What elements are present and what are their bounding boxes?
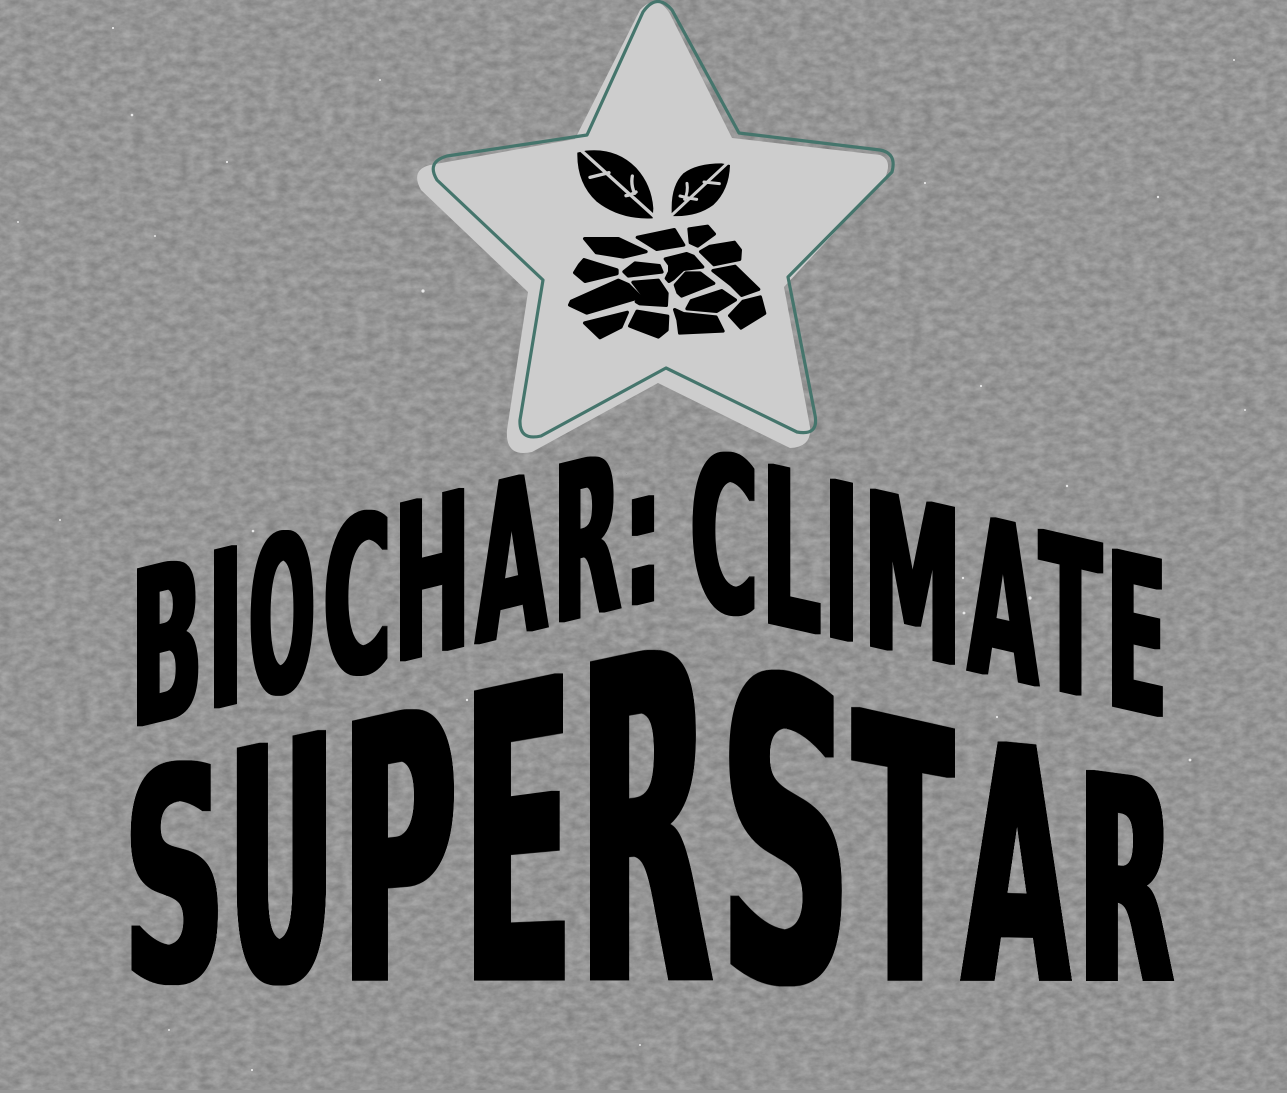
title line 2: SUPERSTAR: S: [126, 691, 225, 1055]
title line 1: BIOCHAR: CLIMATE: L: [762, 418, 821, 688]
title line 1: BIOCHAR: CLIMATE: :: [623, 418, 663, 655]
title line 1: BIOCHAR: CLIMATE: B: [131, 509, 202, 781]
title line 2: SUPERSTAR: R: [1078, 711, 1173, 1050]
title line 1: BIOCHAR: CLIMATE: C: [323, 463, 391, 735]
title line 1: BIOCHAR: CLIMATE: O: [249, 482, 315, 753]
icon: left leaf: [577, 150, 656, 218]
title line 1: BIOCHAR: CLIMATE: A: [476, 424, 547, 697]
title line 2: SUPERSTAR: T: [854, 633, 952, 1070]
title line 1: BIOCHAR: CLIMATE: T: [1040, 485, 1101, 753]
star: light fill: [417, 2, 888, 453]
title line 1: BIOCHAR: CLIMATE: H: [394, 442, 470, 716]
title line 2: SUPERSTAR: E: [464, 587, 573, 1082]
title line 2: SUPERSTAR: S: [719, 576, 850, 1084]
title line 2: SUPERSTAR: A: [963, 672, 1069, 1060]
icon: pile of biochar rocks: [570, 226, 765, 338]
title line 1: BIOCHAR: CLIMATE: C: [690, 402, 758, 671]
title line 1: BIOCHAR: CLIMATE: M: [863, 443, 962, 719]
title line 1: BIOCHAR: CLIMATE: E: [1106, 503, 1167, 770]
title line 2: SUPERSTAR: P: [343, 622, 457, 1073]
title line 2: SUPERSTAR: U: [230, 659, 335, 1063]
star: teal outline: [433, 1, 893, 437]
title line 1: BIOCHAR: CLIMATE: I: [208, 499, 243, 763]
title line 1: BIOCHAR: CLIMATE: I: [824, 433, 859, 696]
title line 1: BIOCHAR: CLIMATE: A: [968, 468, 1038, 739]
title line 2: SUPERSTAR: R: [579, 544, 713, 1093]
icon: right leaf: [669, 163, 730, 218]
icon: biochar leaves and rocks: [570, 150, 765, 338]
title line 1: BIOCHAR: CLIMATE: R: [553, 405, 621, 677]
